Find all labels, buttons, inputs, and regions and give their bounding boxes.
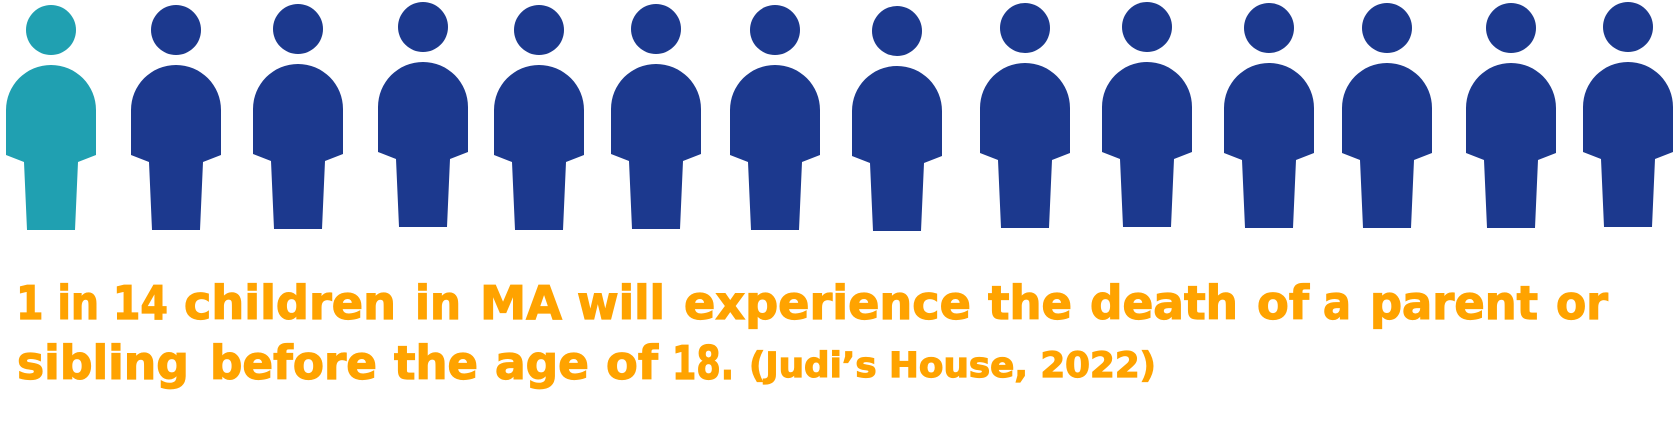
person 5 — [494, 5, 584, 230]
person 6 — [611, 4, 701, 229]
statistic text — [16, 276, 1608, 390]
statement line 1: death — [1090, 276, 1238, 330]
statement line 1: parent — [1370, 276, 1538, 330]
statement line 2: of — [606, 336, 659, 390]
statement line 1: children — [184, 276, 396, 330]
person 11 — [1224, 3, 1314, 228]
person 1: highlighted teal — [6, 5, 96, 230]
statement line 2: 18. — [672, 336, 734, 390]
person 13 — [1466, 3, 1556, 228]
person 14 — [1583, 2, 1673, 227]
citation: (Judi’s House, 2022) — [749, 346, 1156, 386]
statement line 1: a — [1323, 276, 1351, 330]
person 2 — [131, 5, 221, 230]
person 10 — [1102, 2, 1192, 227]
statement line 2: the — [394, 336, 478, 390]
statement line 1: or — [1556, 276, 1608, 330]
person 3 — [253, 4, 343, 229]
statement line 1: MA — [480, 276, 562, 330]
statement line 1: 1 in 14 — [16, 276, 168, 330]
statement line 2: age — [495, 336, 589, 390]
person 12 — [1342, 3, 1432, 228]
statement line 1 — [16, 276, 1608, 330]
person 4 — [378, 2, 468, 227]
statement line 1: the — [988, 276, 1072, 330]
person 8 — [852, 6, 942, 231]
statement line 1: in — [415, 276, 461, 330]
statement line 2 — [17, 336, 734, 390]
statement line 1: of — [1257, 276, 1310, 330]
statement line 2: sibling — [17, 336, 189, 390]
person 7 — [730, 5, 820, 230]
statement line 2: before — [210, 336, 377, 390]
person 9 — [980, 3, 1070, 228]
statement line 1: experience — [684, 276, 971, 330]
pictogram row: 14 people — [6, 2, 1673, 231]
statement line 1: will — [577, 276, 665, 330]
